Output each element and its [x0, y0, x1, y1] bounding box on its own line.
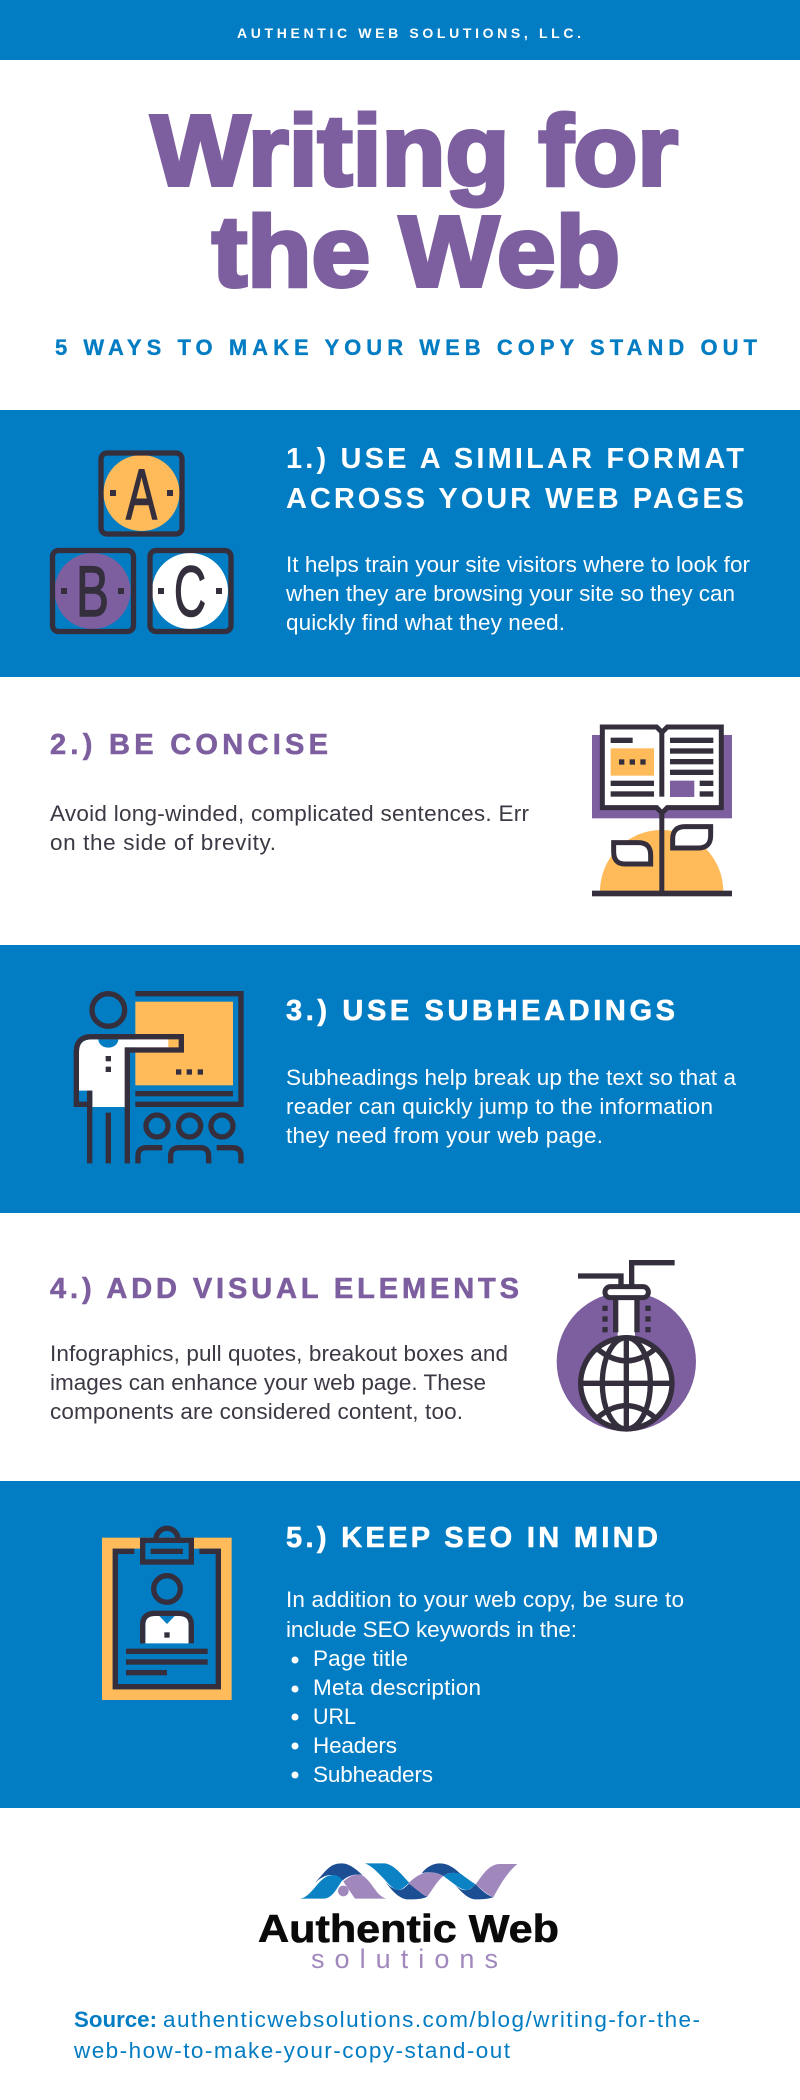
icon: alphabet blocks: B: [76, 553, 109, 632]
heading: tip 2: 2.) BE CONCISE: [50, 729, 328, 761]
title: the Web: [212, 196, 620, 308]
text: tip 4: Infographics, pull quotes, breakout boxes and: [50, 1341, 508, 1366]
panel: tip 5: [0, 1481, 800, 1808]
heading: tip 1: 1.) USE A SIMILAR FORMAT: [286, 443, 744, 475]
list: SEO items: Page title: [313, 1646, 408, 1671]
text: tip 5: include SEO keywords in the:: [286, 1617, 577, 1642]
list: SEO items: [292, 1646, 481, 1787]
panel: tip 1: [0, 410, 800, 677]
text: tip 1: [285, 552, 750, 635]
heading: tip 3: 3.) USE SUBHEADINGS: [286, 995, 675, 1027]
list: SEO items: URL: [313, 1704, 356, 1729]
icon: alphabet blocks: A: [126, 456, 157, 535]
title: Writing for: [151, 95, 678, 207]
text: tip 5: [286, 1587, 684, 1642]
text: tip 4: components are considered content, too.: [50, 1399, 463, 1424]
text: tip 2: [50, 801, 530, 855]
source: Source:: [74, 2007, 157, 2032]
logo: [258, 1863, 559, 1974]
text: tip 2: Avoid long-winded, complicated sentences. Err: [50, 801, 530, 826]
icon: alphabet blocks: [52, 453, 231, 632]
heading: tip 1: [286, 443, 744, 515]
icon: open book plant: [592, 727, 732, 896]
text: tip 2: on the side of brevity.: [50, 830, 276, 855]
top banner: [0, 0, 800, 60]
source: authenticwebsolutions.com/blog/writing-for-the-: [163, 2007, 700, 2032]
logo mark: waves: [300, 1863, 517, 1899]
title: [151, 95, 678, 308]
icon: clipboard with profile: [102, 1528, 232, 1700]
text: tip 3: [286, 1065, 736, 1148]
list: SEO items: Meta description: [313, 1675, 481, 1700]
panel: tip 2: [50, 727, 732, 896]
text: tip 4: images can enhance your web page. These: [50, 1370, 486, 1395]
text: tip 1: quickly find what they need.: [286, 610, 565, 635]
list: SEO items: Subheaders: [313, 1762, 433, 1787]
heading: tip 5: 5.) KEEP SEO IN MIND: [286, 1522, 658, 1554]
subtitle: 5 WAYS TO MAKE YOUR WEB COPY STAND OUT: [55, 335, 758, 360]
logo wordmark: Authentic Web: [258, 1908, 559, 1951]
icon: globe with connector: [557, 1263, 696, 1431]
panel: tip 3: [0, 945, 800, 1213]
text: tip 3: Subheadings help break up the text so that a: [286, 1065, 736, 1090]
icon: alphabet blocks: C: [174, 553, 206, 632]
heading: tip 1: ACROSS YOUR WEB PAGES: [286, 483, 744, 515]
text: tip 3: reader can quickly jump to the information: [286, 1094, 713, 1119]
text: tip 1: It helps train your site visitors where to look for: [286, 552, 750, 577]
text: tip 1: when they are browsing your site so they can: [285, 581, 735, 606]
text: tip 5: In addition to your web copy, be sure to: [286, 1587, 684, 1612]
list: SEO items: Headers: [313, 1733, 397, 1758]
source: web-how-to-make-your-copy-stand-out: [73, 2038, 511, 2063]
logo: solutions: [311, 1944, 498, 1974]
text: tip 4: [50, 1341, 508, 1424]
top banner: AUTHENTIC WEB SOLUTIONS, LLC.: [237, 25, 581, 41]
source: [73, 2007, 700, 2063]
icon: presenter at board: [76, 994, 241, 1163]
text: tip 3: they need from your web page.: [286, 1123, 603, 1148]
panel: tip 4: [50, 1263, 696, 1431]
heading: tip 4: 4.) ADD VISUAL ELEMENTS: [50, 1273, 519, 1305]
